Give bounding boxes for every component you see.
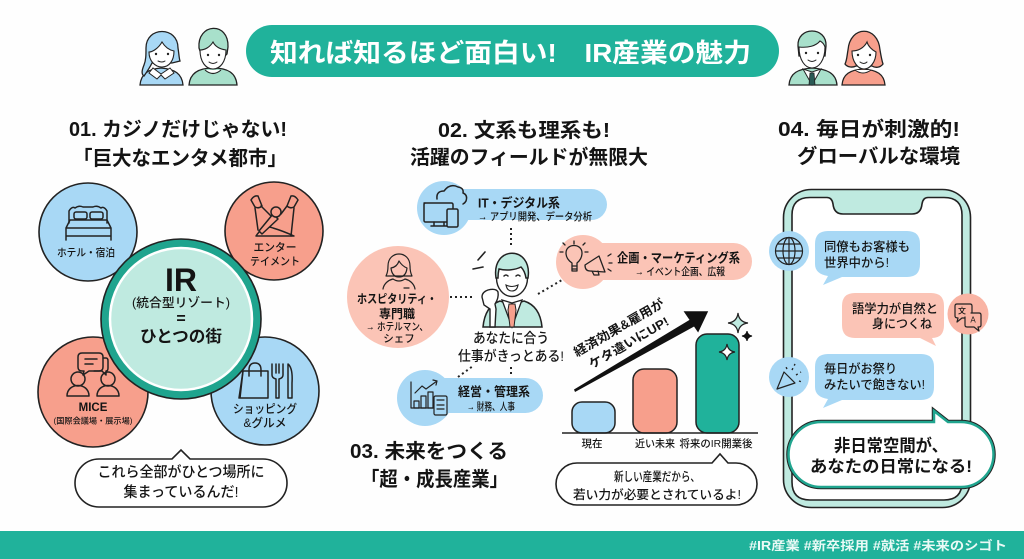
career bubble: management: 経営・管理系 (458, 384, 530, 399)
circle: entertainment: エンター (254, 241, 296, 254)
growth arrow (574, 312, 707, 392)
heading: 01 (69, 118, 287, 170)
circle: IR centre (101, 239, 261, 399)
icon: spotlights and microphone (251, 196, 298, 236)
circle: MICE: MICE (79, 402, 108, 414)
icon: businessman (789, 31, 837, 85)
career bubble: hospitality (347, 246, 449, 348)
heading: 04: 04. 毎日が刺激的! (778, 117, 960, 141)
heading: 03: 「超・成長産業」 (361, 467, 508, 491)
growth label: ケタ違いにUP! (586, 314, 671, 372)
career bubble: hospitality: 専門職 (379, 306, 415, 321)
callout: all in one place (75, 450, 287, 507)
heading: 03 (350, 440, 508, 491)
icon: globe (769, 231, 809, 271)
circle: shopping and gourmet: ショッピング (233, 401, 297, 416)
heading: 04 (778, 117, 960, 168)
chat: language skills: 身につくね (872, 316, 932, 331)
icon: translation (948, 294, 988, 334)
icon: professional woman (842, 31, 885, 85)
text: a job for you: あなたに合う (473, 330, 549, 346)
heading: 02: 02. 文系も理系も! (438, 119, 610, 142)
footer band: #IR産業 #新卒採用 #就活 #未来のシゴト (749, 538, 1007, 553)
callout: young power: 新しい産業だから、 (614, 469, 700, 484)
icon: chart and calculator (411, 380, 447, 415)
icon: lightbulb and megaphone (560, 241, 612, 275)
career bubble: management: → 財務、人事 (467, 400, 515, 413)
icon: hospitality staff (383, 254, 415, 289)
career bubble: management (397, 370, 543, 426)
icon: bed (66, 206, 111, 240)
title banner: 知れば知るほど面白い! IR産業の魅力 (270, 38, 751, 68)
heading: 02 (410, 119, 648, 169)
chat: colleagues worldwide: 同僚もお客様も (824, 239, 910, 254)
circle: hotel (39, 183, 137, 281)
callout: young power: 若い力が必要とされているよ! (573, 487, 741, 502)
career bubble: IT digital (417, 181, 607, 235)
circle: hotel: ホテル・宿泊 (57, 246, 115, 259)
circle: shopping and gourmet: &グルメ (244, 415, 286, 430)
icon: translation: 文 (958, 306, 966, 316)
heading: 02: 活躍のフィールドが無限大 (410, 145, 648, 169)
bar chart: growth: 近い未来 (635, 437, 675, 450)
circle: entertainment: テイメント (250, 255, 300, 268)
circle: entertainment (225, 182, 323, 280)
heading: 03: 03. 未来をつくる (350, 440, 508, 463)
icon: translation: A (970, 316, 976, 324)
career bubble: planning and marketing: 企画・マーケティング系 (617, 250, 740, 266)
bar chart: growth: 現在 (582, 437, 602, 450)
circle: IR centre: = (176, 310, 186, 328)
panel: IR resort diagram (38, 182, 323, 447)
heading: 01: 01. カジノだけじゃない! (69, 118, 287, 141)
circle: shopping and gourmet (211, 337, 319, 445)
icon: shopping bag and cutlery (239, 363, 292, 398)
circle: IR centre: (統合型リゾート) (132, 295, 230, 310)
career bubble: hospitality: ホスピタリティ・ (357, 292, 437, 306)
growth label: 経済効果&雇用が (571, 295, 667, 360)
callout: all in one place: 集まっているんだ! (124, 484, 238, 501)
heading: 01: 「巨大なエンタメ都市」 (73, 147, 287, 170)
career bubble: hospitality: → ホテルマン、 (366, 321, 428, 333)
callout: everyday extraordinary: あなたの日常になる! (810, 457, 972, 476)
character: cheering businessperson (473, 252, 542, 327)
circle: IR centre: ひとつの街 (140, 327, 222, 346)
icon: cloud and devices (424, 186, 467, 227)
dotted connectors (450, 228, 562, 377)
career bubble: IT digital: IT・デジタル系 (478, 196, 560, 210)
career bubble: planning and marketing (556, 235, 752, 289)
chat: colleagues worldwide: 世界中から! (824, 255, 889, 270)
text: a job for you (458, 330, 564, 364)
circle: MICE (38, 337, 148, 447)
career bubble: planning and marketing: → イベント企画、広報 (635, 265, 725, 278)
icon: sparkles (719, 313, 752, 360)
chat: festival every day: 毎日がお祭り (824, 361, 897, 376)
panel: smartphone (769, 190, 994, 508)
phone frame (784, 190, 970, 508)
icon: party popper (769, 357, 809, 397)
career bubble: hospitality: シェフ (383, 333, 415, 345)
bar chart: growth: 将来のIR開業後 (680, 437, 753, 450)
title banner (246, 25, 779, 77)
bar chart: growth (562, 295, 758, 450)
chat: festival every day: みたいで飽きない! (824, 377, 925, 392)
icon: student man (189, 28, 237, 85)
chat: festival every day (815, 354, 934, 408)
circle: MICE: (国際会議場・展示場) (54, 416, 133, 426)
chat: language skills: 語学力が自然と (852, 301, 938, 316)
circle: IR centre: IR (165, 262, 197, 298)
icon: student woman (140, 32, 183, 85)
chat: language skills (842, 293, 944, 346)
chat: colleagues worldwide (815, 231, 920, 285)
callout: everyday extraordinary: 非日常空間が、 (834, 436, 948, 456)
callout: young power (556, 454, 757, 505)
career bubble: IT digital: → アプリ開発、データ分析 (478, 210, 592, 223)
footer band (0, 531, 1024, 559)
callout: all in one place: これら全部がひとつ場所に (98, 463, 264, 481)
text: a job for you: 仕事がきっとある! (458, 348, 564, 364)
icon: people talking (67, 353, 119, 396)
heading: 04: グローバルな環境 (797, 144, 960, 168)
callout: everyday extraordinary (788, 411, 994, 487)
